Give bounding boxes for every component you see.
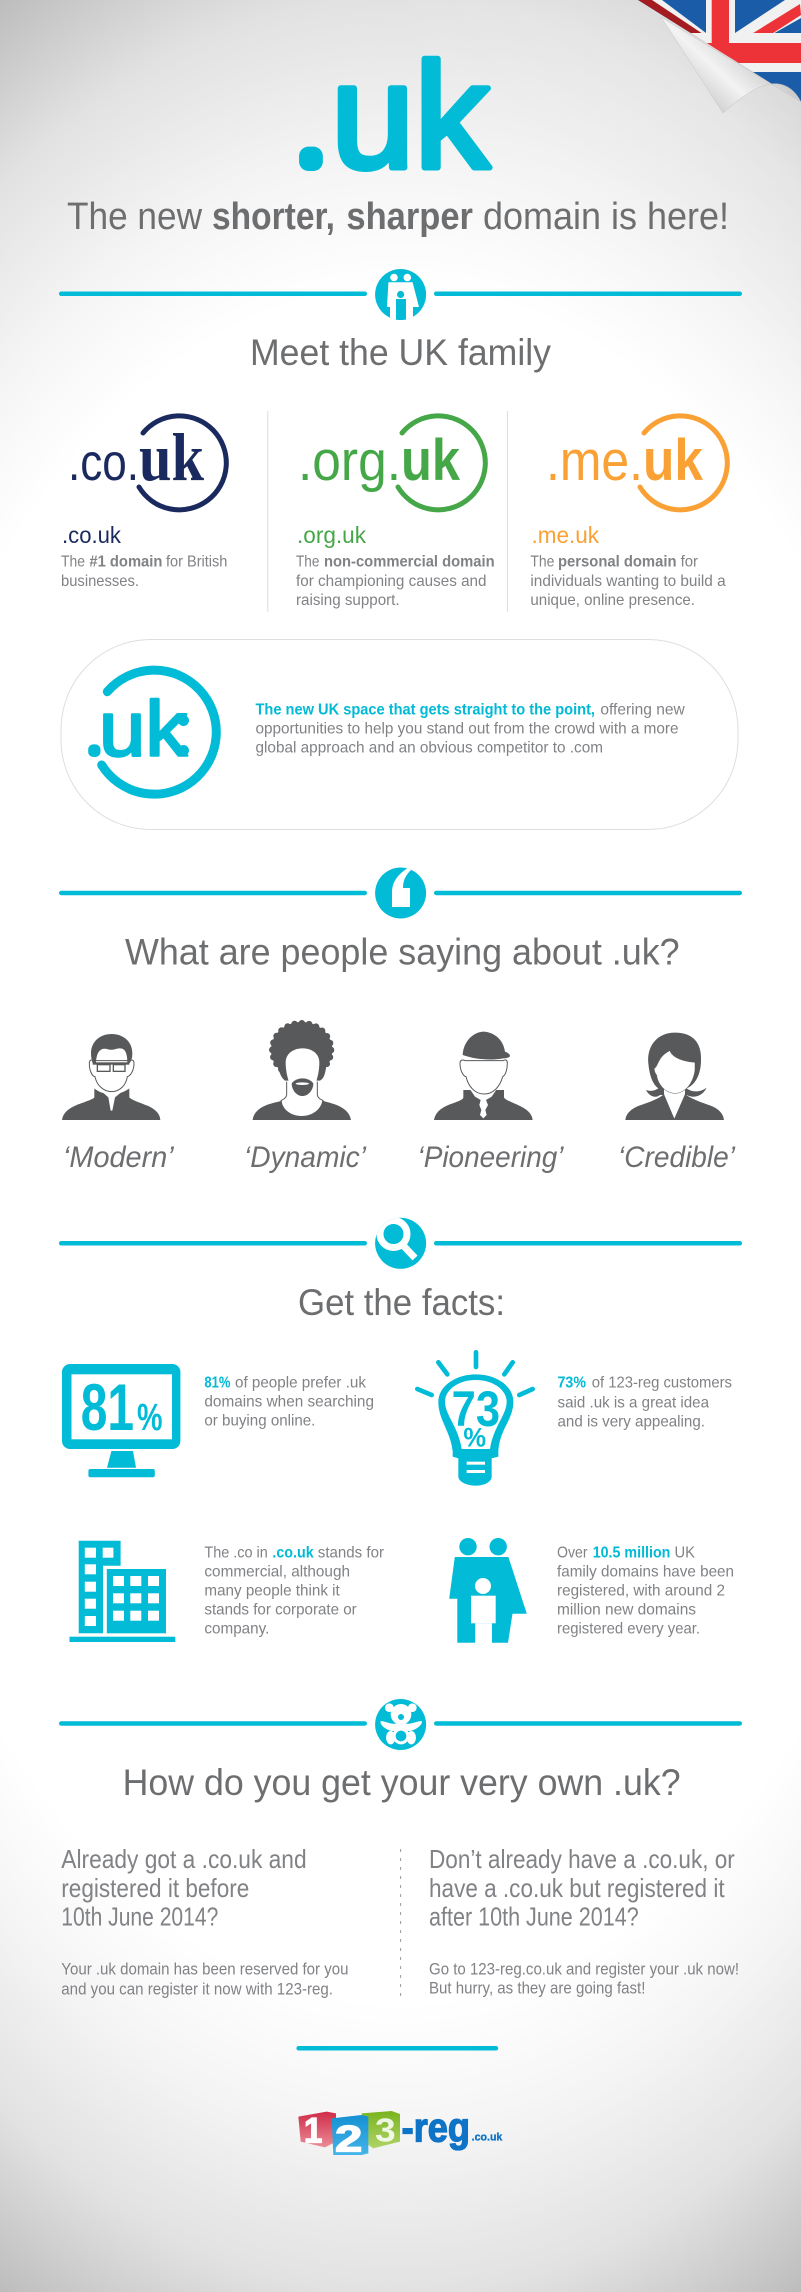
- fact text: company.: [204, 1621, 269, 1638]
- panel: don't have a .co.uk: after 10th June 2014?: [429, 1901, 639, 1931]
- logo: me.uk: uk: [643, 428, 704, 493]
- subtitle: domain is here!: [483, 196, 729, 238]
- logo: 123-reg: 3: [375, 2113, 396, 2150]
- fact text: [557, 1545, 734, 1638]
- logo: uk ring: uk: [99, 684, 188, 772]
- icon: monitor: [62, 1364, 180, 1477]
- logo: me.uk: .me.: [546, 429, 643, 493]
- logo: org.uk: [298, 416, 485, 510]
- section divider: quote: [59, 868, 742, 918]
- panel: org.uk: [296, 416, 495, 609]
- callout text: global approach and an obvious competitor to .com: [256, 739, 603, 756]
- icon: light bulb: [417, 1352, 533, 1486]
- description: org.uk: raising support.: [296, 592, 400, 609]
- panel: already got a .co.uk: 10th June 2014?: [61, 1901, 218, 1931]
- fact text: The .co in: [204, 1545, 268, 1562]
- fact text: .co.uk: [272, 1545, 314, 1562]
- fact text: Over: [557, 1545, 588, 1562]
- fact text: and is very appealing.: [558, 1414, 705, 1431]
- quote words: ‘Credible’: [618, 1141, 736, 1174]
- logo: uk ring: [91, 670, 216, 794]
- callout text: The new UK space that gets straight to the point,: [256, 701, 595, 718]
- fact: 10.5 million: [449, 1538, 734, 1643]
- description: co.uk: #1 domain: [89, 554, 162, 571]
- quote words: ‘Modern’: [63, 1141, 175, 1174]
- icon: light bulb: 73: [452, 1381, 500, 1437]
- quote words: [63, 1141, 736, 1174]
- description: co.uk: [61, 554, 227, 590]
- fact text: [558, 1374, 732, 1431]
- fact text: [204, 1374, 374, 1430]
- fact: 73%: [417, 1352, 732, 1486]
- label: .me.uk: .me.uk: [532, 522, 599, 548]
- subtitle: [67, 196, 729, 238]
- section divider: family: [59, 269, 742, 322]
- avatar: Credible: [625, 1033, 724, 1120]
- logo: uk ring: .: [91, 731, 98, 758]
- fact text: registered every year.: [557, 1621, 700, 1638]
- panel: already got a .co.uk: Your .uk domain has been reserved for you: [61, 1959, 349, 1978]
- subtitle: shorter,: [212, 196, 335, 238]
- heading: How do you get: How do you get your very own .uk?: [123, 1762, 681, 1803]
- panel: new uk callout: [61, 640, 738, 830]
- logo: 123-reg: 1: [304, 2112, 322, 2151]
- fact text: family domains have been: [557, 1564, 734, 1581]
- logo: co.uk: .co.: [68, 434, 139, 492]
- icon: union jack page curl: [638, 0, 801, 113]
- description: me.uk: for: [681, 554, 699, 571]
- panel: already got a .co.uk: Already got a .co.uk and: [61, 1844, 307, 1874]
- fact text: 73%: [558, 1374, 586, 1391]
- avatar: Dynamic: [253, 1022, 351, 1120]
- callout text: opportunities to help you stand out from the crowd with a more: [256, 720, 679, 737]
- fact text: million new domains: [557, 1602, 696, 1619]
- panel: don't have a .co.uk: Don’t already have a .co.uk, or: [429, 1844, 735, 1874]
- fact text: of 123-reg customers: [592, 1374, 732, 1391]
- logo: me.uk: [546, 416, 727, 510]
- subtitle: sharper: [346, 196, 473, 238]
- description: org.uk: The: [296, 554, 319, 571]
- logo: co.uk: [68, 416, 226, 510]
- description: me.uk: unique, online presence.: [530, 592, 695, 609]
- logo: org.uk: .org.: [298, 429, 401, 493]
- description: org.uk: for championing causes and: [296, 573, 486, 590]
- subtitle: The new: [67, 196, 203, 238]
- fact text: stands for: [318, 1545, 385, 1562]
- fact: co.uk commercial: [70, 1541, 385, 1642]
- label: .co.uk: .co.uk: [62, 522, 121, 548]
- fact text: 81%: [204, 1374, 230, 1391]
- icon: family: [449, 1538, 527, 1643]
- description: org.uk: [296, 554, 495, 609]
- fact text: of people prefer .uk: [235, 1374, 367, 1391]
- icon: monitor: 81: [81, 1370, 134, 1444]
- label: .org.uk: .org.uk: [297, 522, 366, 548]
- icon: buildings: [70, 1541, 175, 1642]
- fact text: domains when searching: [204, 1394, 374, 1411]
- quote words: ‘Pioneering’: [418, 1141, 565, 1174]
- heading: Get the facts: Get the facts:: [298, 1282, 505, 1323]
- avatar: Pioneering: [434, 1032, 533, 1120]
- fact text: stands for corporate or: [204, 1602, 357, 1619]
- description: co.uk: for British: [166, 554, 227, 571]
- description: me.uk: personal domain: [558, 554, 676, 571]
- description: org.uk: non-commercial domain: [324, 554, 495, 571]
- description: co.uk: The: [61, 554, 85, 571]
- title: .uk: uk: [331, 32, 490, 200]
- logo: 123-reg: [298, 2105, 503, 2160]
- description: co.uk: businesses.: [61, 573, 139, 590]
- icon: light bulb: %: [463, 1423, 486, 1453]
- quote words: ‘Dynamic’: [244, 1141, 367, 1174]
- fact: 81%: [62, 1364, 374, 1477]
- fact text: said .uk is a great idea: [558, 1394, 709, 1411]
- panel: don't have a .co.uk: [429, 1844, 739, 1997]
- callout text: offering new: [600, 701, 685, 718]
- heading: What are people saying: What are people saying about .uk?: [125, 931, 680, 972]
- fact text: many people think it: [204, 1583, 340, 1600]
- description: me.uk: individuals wanting to build a: [530, 573, 726, 590]
- panel: co.uk: [61, 416, 227, 590]
- fact text: registered, with around 2: [557, 1583, 725, 1600]
- fact text: 10.5 million: [593, 1545, 670, 1562]
- logo: co.uk: uk: [139, 419, 204, 495]
- logo: org.uk: uk: [401, 428, 461, 493]
- avatar: Modern: [62, 1034, 160, 1120]
- section divider: magnifier: [59, 1218, 742, 1269]
- logo: 123-reg: 2: [335, 2119, 362, 2160]
- description: me.uk: [530, 554, 726, 609]
- panel: don't have a .co.uk: But hurry, as they are going fast!: [429, 1978, 645, 1997]
- heading: Meet the UK family: Meet the UK family: [250, 332, 551, 373]
- fact text: [204, 1545, 385, 1638]
- icon: monitor: %: [137, 1397, 162, 1439]
- section divider: teddy bear: [59, 1699, 742, 1750]
- fact text: or buying online.: [204, 1413, 315, 1430]
- logo: 123-reg: .co.uk: [472, 2132, 503, 2144]
- fact text: commercial, although: [204, 1564, 350, 1581]
- title: .uk: .: [304, 117, 318, 173]
- logo: 123-reg: -reg: [402, 2105, 470, 2151]
- panel: already got a .co.uk: [61, 1844, 349, 1998]
- fact text: UK: [674, 1545, 695, 1562]
- panel: already got a .co.uk: and you can register it now with 123-reg.: [61, 1979, 333, 1998]
- panel: don't have a .co.uk: have a .co.uk but registered it: [429, 1873, 725, 1903]
- description: me.uk: The: [530, 554, 554, 571]
- panel: already got a .co.uk: registered it before: [61, 1873, 249, 1903]
- callout text: [256, 701, 685, 756]
- panel: me.uk: [530, 416, 727, 609]
- panel: don't have a .co.uk: Go to 123-reg.co.uk and register your .uk now!: [429, 1959, 739, 1978]
